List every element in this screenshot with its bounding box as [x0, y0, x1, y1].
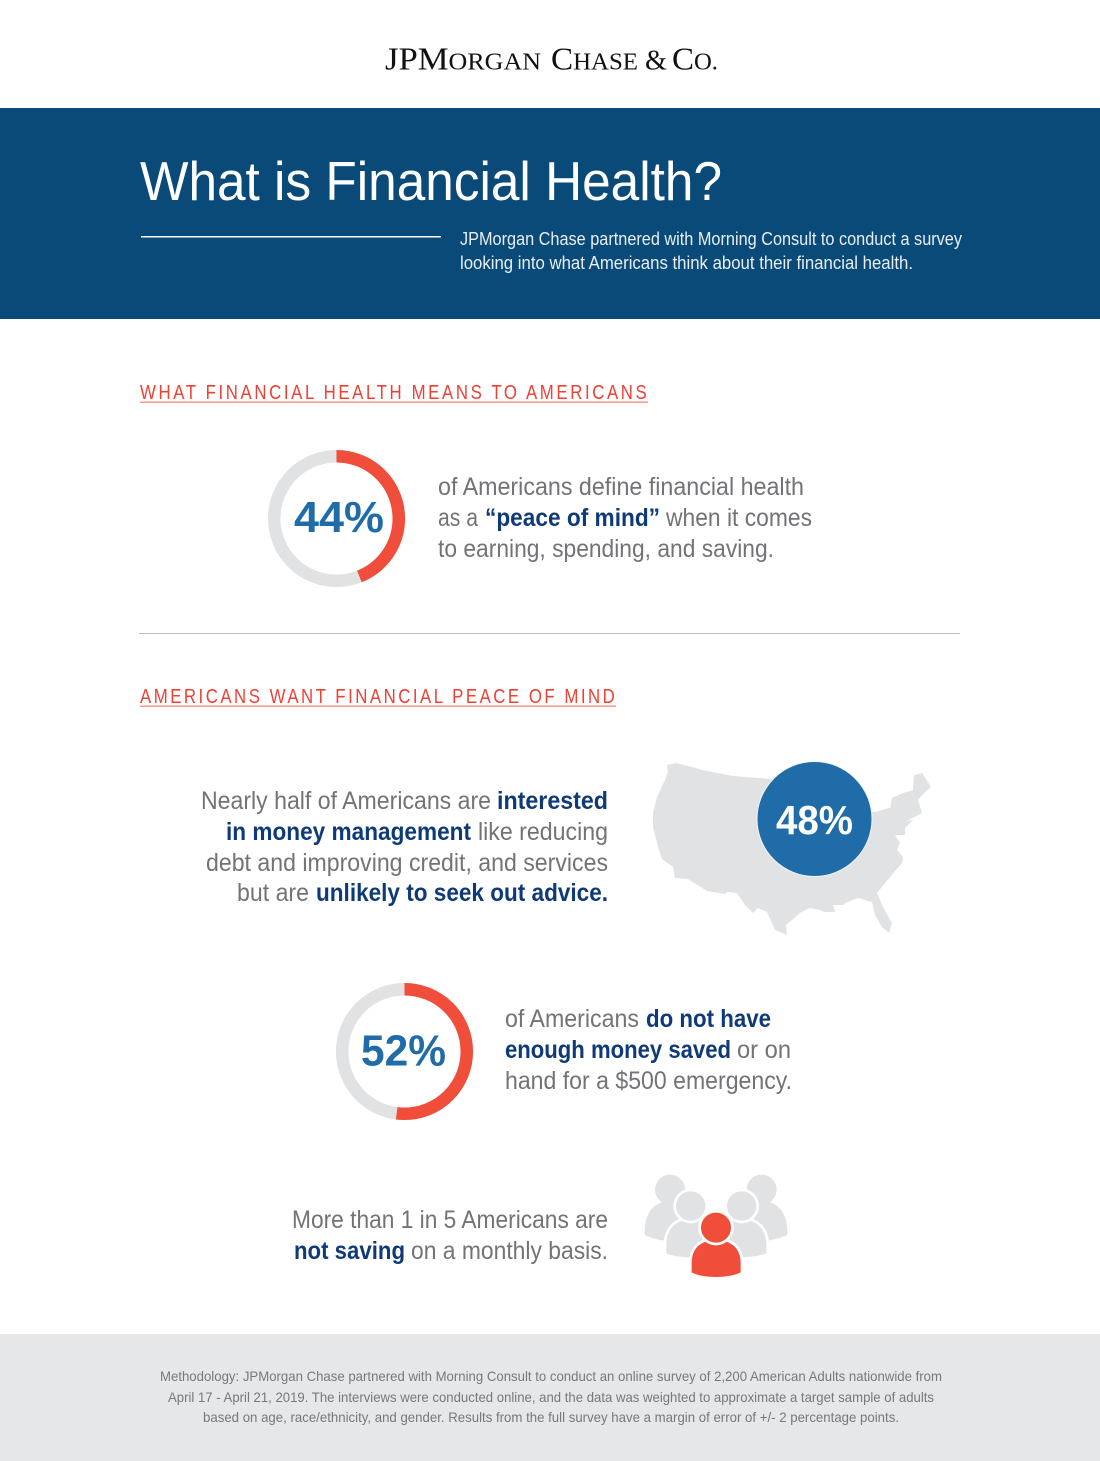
text: peace of mind — [438, 473, 812, 563]
text: not saving: on a monthly basis. — [411, 1237, 608, 1265]
text: money management: like reducing — [478, 818, 608, 846]
text: emergency savings: or on — [737, 1036, 791, 1064]
logo: JPMORGAN — [385, 40, 541, 76]
text: peace of mind: to earning, spending, and saving. — [438, 535, 774, 563]
logo: & — [645, 46, 667, 76]
text: money management — [201, 787, 608, 907]
text: money management: Nearly half of Americans are — [201, 787, 491, 815]
section heading: what financial health means: WHAT FINANCIAL HEALTH MEANS TO AMERICANS — [140, 380, 647, 403]
footer: methodology: Methodology: JPMorgan Chase partnered with Morning Consult to conduct an online survey of 2,200 American Adults nationwide from — [160, 1368, 942, 1384]
text: peace of mind: when it comes — [665, 504, 812, 532]
footer: methodology: April 17 - April 21, 2019. The interviews were conducted online, and the data was weighted to approximate a target sample of adults — [168, 1389, 934, 1405]
header banner — [0, 108, 1100, 319]
footer: methodology — [0, 1334, 1100, 1461]
text: peace of mind: of Americans define financial health — [438, 473, 804, 501]
donut chart: 44% — [274, 456, 399, 581]
text: emergency savings: of Americans — [505, 1005, 639, 1033]
logo: CO. — [672, 40, 718, 76]
48% badge: 48% — [776, 797, 853, 843]
intro text — [460, 229, 962, 273]
text: peace of mind: as a — [438, 504, 478, 532]
donut chart: 52%: 52% — [361, 1026, 446, 1076]
text: emergency savings: hand for a $500 emergency. — [505, 1067, 792, 1095]
text: emergency savings: enough money saved — [505, 1036, 731, 1064]
logo: CHASE — [551, 40, 638, 76]
text: peace of mind: “peace of mind” — [485, 504, 660, 532]
intro text: looking into what Americans think about their financial health. — [460, 253, 913, 273]
text: not saving: More than 1 in 5 Americans are — [292, 1206, 608, 1234]
text: money management: interested — [497, 787, 608, 815]
title: What is Financial Health? — [140, 150, 722, 212]
text: money management: unlikely to seek out advice. — [316, 879, 608, 907]
logo — [385, 40, 718, 76]
footer: methodology: based on age, race/ethnicity, and gender. Results from the full survey have a margin of error of +/- 2 percentage points. — [203, 1409, 899, 1425]
intro text: JPMorgan Chase partnered with Morning Consult to conduct a survey — [460, 229, 962, 249]
text: emergency savings — [505, 1005, 792, 1095]
text: emergency savings: do not have — [646, 1005, 771, 1033]
text: not saving — [292, 1206, 608, 1265]
donut chart: 52% — [342, 989, 467, 1114]
donut chart: 44%: 44% — [294, 493, 384, 542]
text: money management: debt and improving credit, and services — [206, 849, 608, 877]
48% badge — [757, 762, 872, 876]
icon: group of people — [645, 1175, 787, 1278]
text: money management: in money management — [226, 818, 472, 846]
text: money management: but are — [237, 879, 309, 907]
US map with 48% — [653, 762, 931, 935]
text: not saving: not saving — [294, 1237, 405, 1265]
map shape — [653, 763, 931, 935]
section heading: peace of mind: AMERICANS WANT FINANCIAL PEACE OF MIND — [140, 684, 615, 707]
